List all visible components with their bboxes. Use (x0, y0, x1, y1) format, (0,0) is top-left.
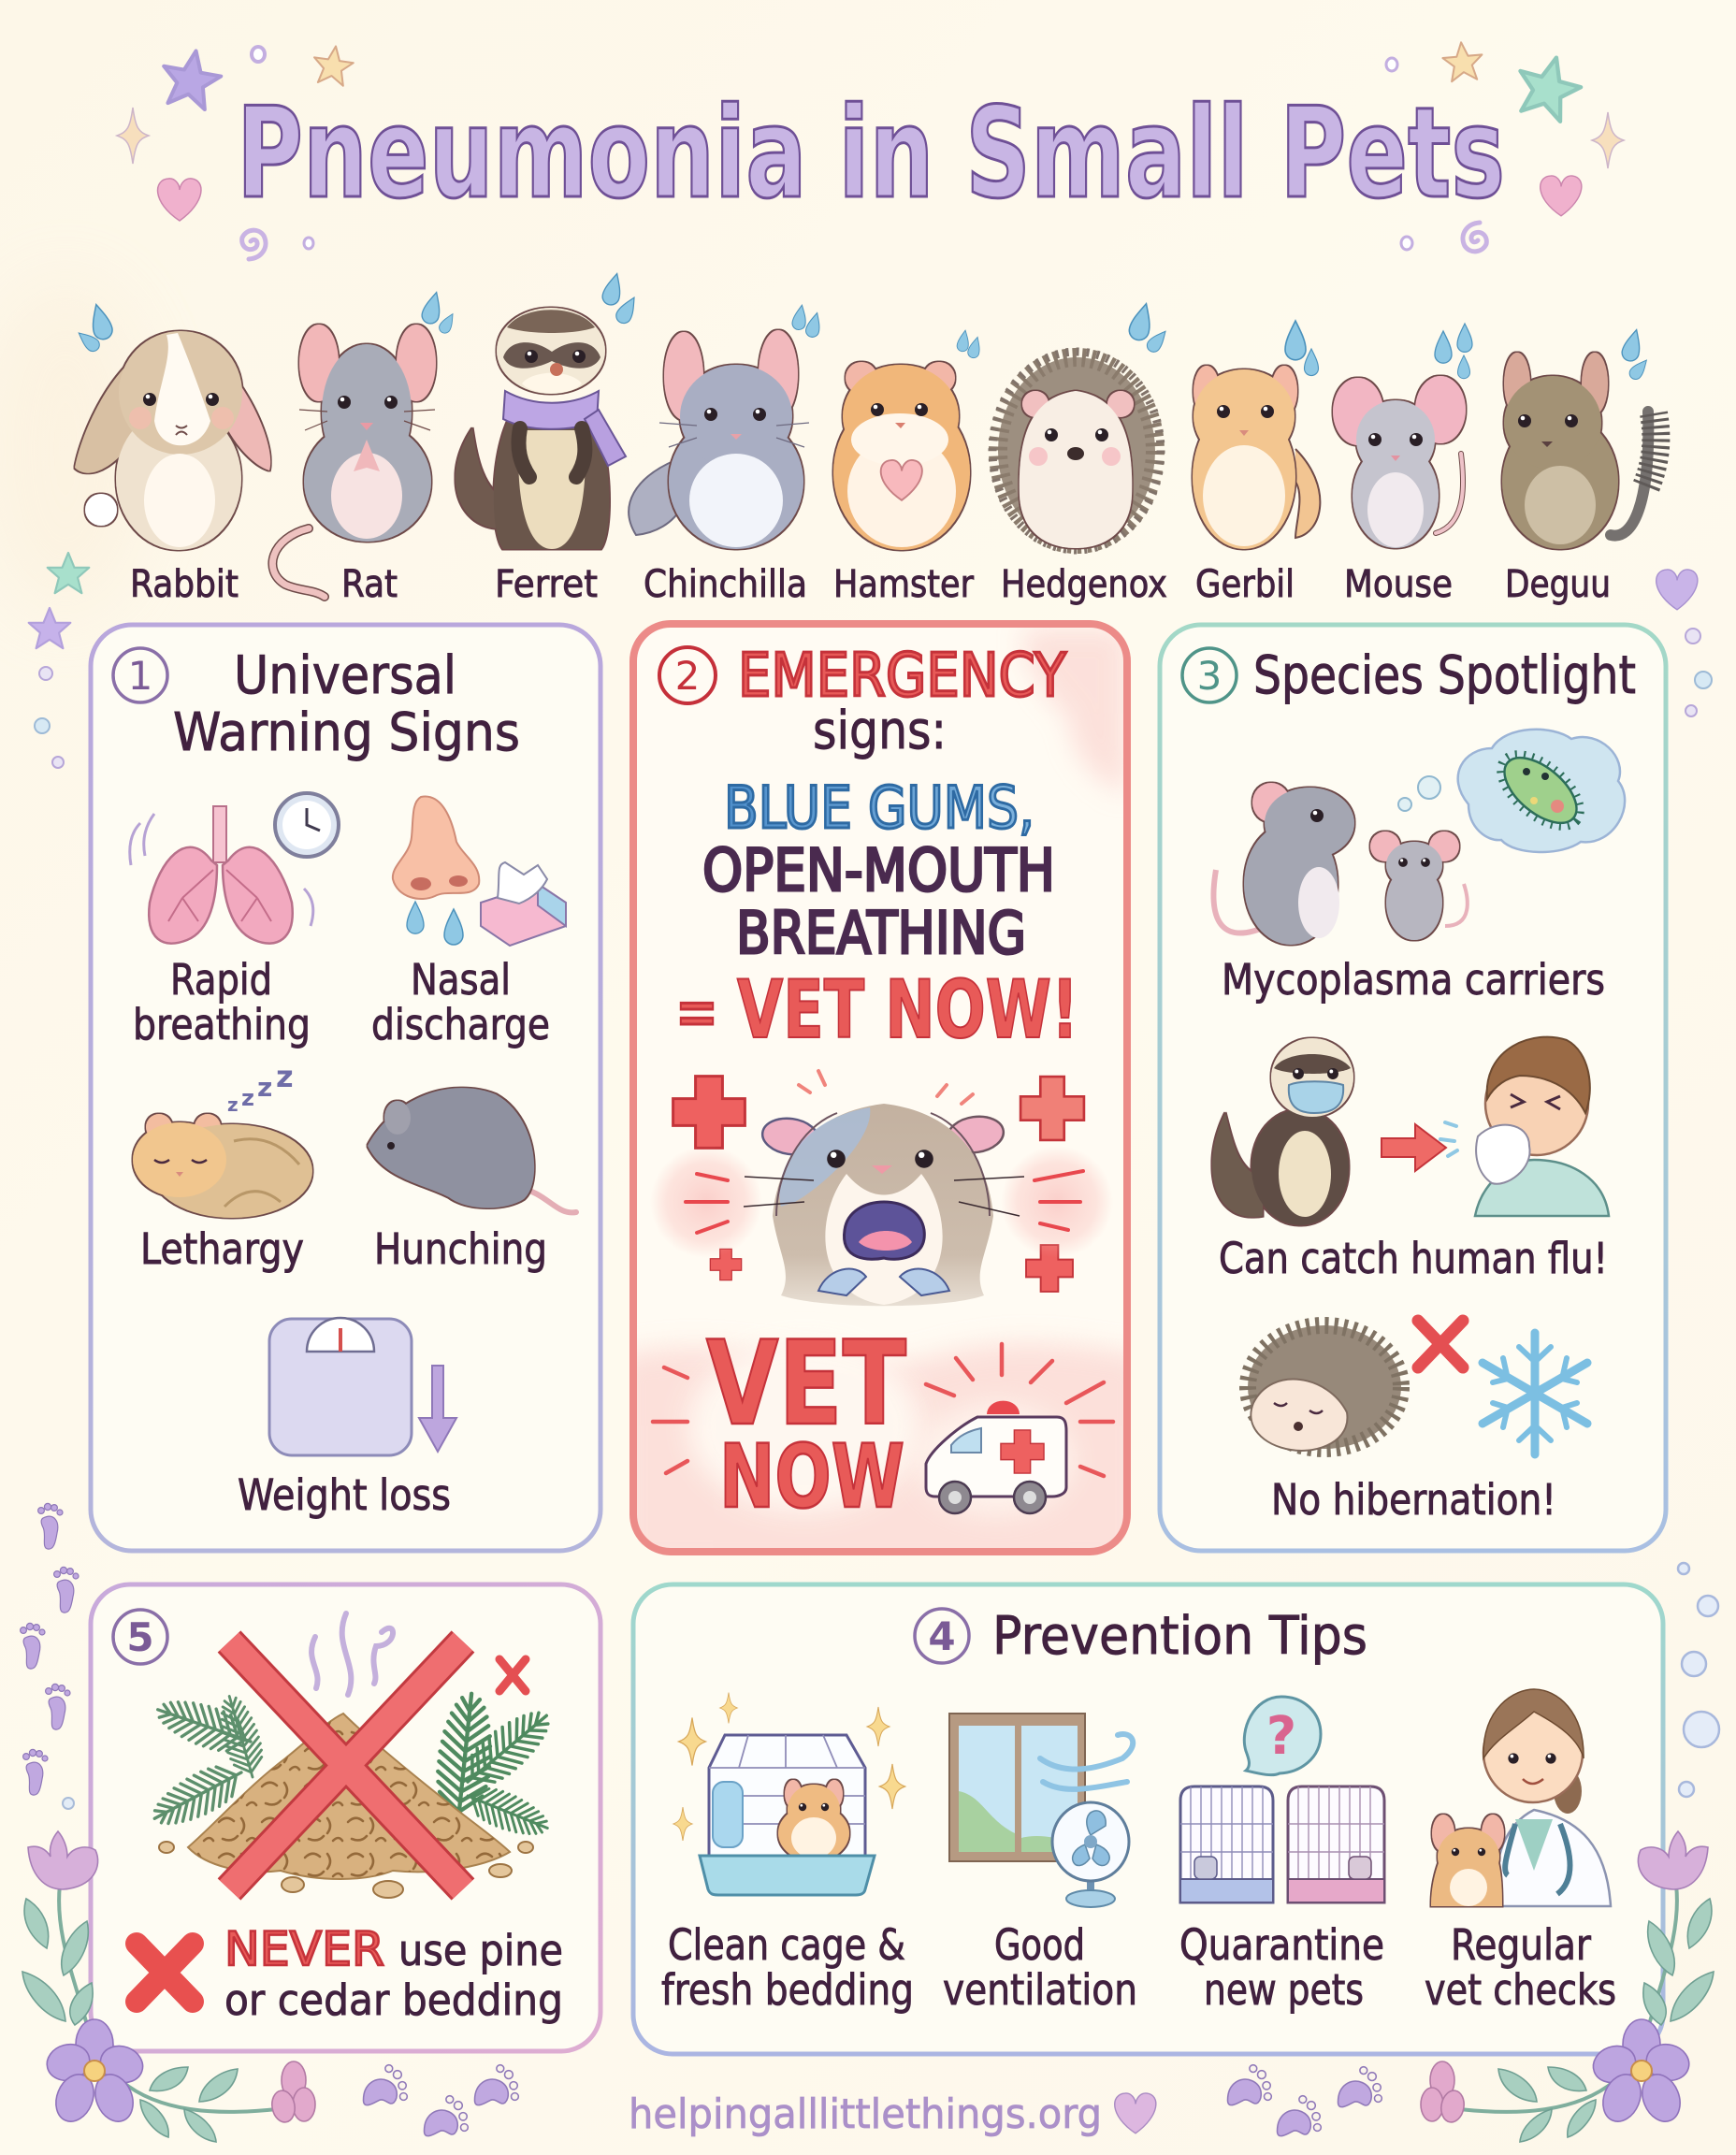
right bubbles (1678, 1563, 1719, 1797)
ventilation label: Good (994, 1920, 1085, 1970)
red x (1418, 1321, 1463, 1367)
panel 2: emergency signs (617, 624, 1146, 1571)
number 2 (659, 647, 716, 703)
animal names: Hedgenox (1001, 563, 1167, 606)
icon: window and wind (949, 1714, 1085, 1861)
icon: nose and drops (393, 797, 479, 945)
lethargy label: Lethargy (140, 1224, 304, 1274)
icon: two quarantine cages (1180, 1786, 1384, 1902)
ventilation label (943, 1920, 1137, 2015)
number 4: 4 (928, 1613, 956, 1659)
icon: vet with hamster (1431, 1689, 1611, 1906)
icon: small mouse (1370, 832, 1468, 940)
clean cage label (661, 1920, 914, 2015)
pink washes (617, 629, 1146, 1571)
icon: sleeping hamster (133, 1114, 312, 1218)
pine branches right (433, 1691, 559, 1844)
sweat drops (75, 271, 1651, 382)
animal names: Chinchilla (644, 563, 807, 606)
corner flowers right (1421, 1831, 1714, 2142)
mouse (1333, 376, 1466, 548)
red crosses (673, 1077, 1084, 1292)
nasal discharge label: discharge (371, 1000, 550, 1049)
panel 1: universal warning signs (91, 625, 600, 1551)
hunching label: Hunching (374, 1224, 547, 1274)
rapid breathing label: Rapid (170, 955, 272, 1005)
never text: or cedar bedding (224, 1975, 563, 2025)
gerbil (1193, 366, 1320, 549)
sparkles (673, 1693, 905, 1841)
rabbit (75, 331, 270, 550)
icon: zzz: z (227, 1093, 239, 1116)
rat (272, 325, 436, 597)
quarantine label: Quarantine (1179, 1920, 1384, 1970)
weight loss label: Weight loss (238, 1470, 451, 1520)
bottom paw prints (363, 2065, 1382, 2136)
small red x (499, 1659, 526, 1691)
hamster (833, 362, 970, 550)
ventilation label: ventilation (943, 1965, 1137, 2015)
icon: zzz (227, 1059, 294, 1116)
icon: scale with arrow (269, 1318, 456, 1455)
number 2: 2 (675, 653, 700, 699)
big vet now: NOW (719, 1426, 904, 1528)
vet checks label: vet checks (1425, 1965, 1616, 2015)
never text: use pine (398, 1926, 563, 1975)
heading: Species Spotlight (1253, 645, 1636, 706)
icon: fan (1052, 1802, 1129, 1907)
icon: thought bubble with bacteria (1398, 730, 1625, 852)
vet checks label: Regular (1451, 1920, 1591, 1970)
number 5: 5 (126, 1614, 154, 1660)
never text: NEVER (224, 1922, 384, 1976)
arrow (1382, 1124, 1446, 1171)
panel border (633, 624, 1127, 1552)
big vet now: VET (706, 1317, 906, 1452)
panicked hamster (744, 1104, 1024, 1306)
emergency heading: EMERGENCY (738, 642, 1067, 711)
deguu (1502, 353, 1656, 549)
icon: question bubble: ? (1266, 1706, 1296, 1767)
left footprints (21, 1503, 79, 1809)
panel 4: prevention tips (633, 1584, 1663, 2054)
icon: hunching rat (368, 1088, 576, 1212)
chinchilla (629, 330, 809, 549)
icon: snowflake (1483, 1333, 1587, 1454)
rapid breathing label (133, 955, 311, 1049)
website footer: helpingalllittlethings.org (629, 2090, 1102, 2138)
icon: sleeping hedgehog (1248, 1325, 1401, 1451)
nasal discharge label (371, 955, 550, 1049)
never text (224, 1922, 563, 2025)
ferret (456, 308, 626, 549)
animal names: Deguu (1505, 563, 1611, 606)
animal names: Rabbit (130, 563, 239, 606)
icon: zzz: z (241, 1085, 254, 1111)
number 3 (1182, 648, 1237, 702)
animal names (130, 563, 1611, 606)
steam (311, 1613, 393, 1695)
icon: ferret with mask (1212, 1038, 1353, 1225)
rapid breathing label: breathing (133, 1000, 311, 1049)
icon: sick person (1440, 1037, 1609, 1216)
icon: zzz: z (257, 1072, 272, 1103)
can catch flu label: Can catch human flu! (1219, 1234, 1608, 1283)
icon: lungs (130, 806, 313, 944)
pine branches left (145, 1691, 268, 1836)
never x icon (137, 1944, 193, 2002)
vet checks label (1425, 1920, 1616, 2015)
corner flowers left (22, 1831, 315, 2142)
icon: zzz: z (276, 1059, 294, 1094)
bedding pile (159, 1714, 533, 1898)
equals vet now (675, 963, 1078, 1057)
number 3: 3 (1197, 653, 1222, 699)
wind swirls (1040, 1734, 1133, 1789)
no hibernation label: No hibernation! (1271, 1475, 1556, 1525)
blue gums: BLUE GUMS, (724, 774, 1034, 842)
number 5 (113, 1610, 167, 1664)
clean cage label: fresh bedding (661, 1965, 914, 2015)
animal names: Gerbil (1195, 563, 1295, 606)
number 1 (113, 648, 167, 702)
open mouth breathing (702, 836, 1055, 967)
equals vet now: VET NOW! (737, 963, 1078, 1057)
icon: clock (275, 793, 339, 857)
large red x (229, 1642, 463, 1889)
number 1: 1 (128, 653, 152, 699)
icon: question bubble (1244, 1697, 1321, 1775)
hedgehog (992, 352, 1161, 550)
signs: signs: (813, 701, 947, 761)
animal names: Mouse (1344, 563, 1453, 606)
open mouth breathing: OPEN-MOUTH (702, 836, 1055, 904)
nasal discharge label: Nasal (411, 955, 511, 1005)
icon: rat (1213, 783, 1354, 945)
animal names: Hamster (833, 563, 974, 606)
big vet now (706, 1317, 906, 1528)
heading: Prevention Tips (992, 1606, 1367, 1667)
icon: ambulance (926, 1401, 1066, 1513)
heading: Universal (234, 645, 456, 706)
heading (173, 645, 520, 763)
panel 3: species spotlight (1160, 625, 1666, 1551)
red glows (650, 1071, 1113, 1258)
title decorations (29, 40, 1712, 768)
clean cage label: Clean cage & (668, 1920, 905, 1970)
heading: Warning Signs (173, 702, 520, 763)
quarantine label (1179, 1920, 1384, 2015)
icon: tissue box (481, 862, 566, 946)
animal row (75, 271, 1656, 597)
number 4 (915, 1609, 969, 1663)
alarm rays (653, 1344, 1113, 1476)
equals vet now: = (675, 968, 718, 1055)
quarantine label: new pets (1204, 1965, 1364, 2015)
animal names: Ferret (495, 563, 598, 606)
mycoplasma label: Mycoplasma carriers (1222, 955, 1605, 1005)
icon: clean cage (700, 1735, 875, 1895)
open mouth breathing: BREATHING (736, 899, 1026, 967)
animal names: Rat (341, 563, 398, 606)
panel 5: bedding warning (91, 1584, 600, 2051)
